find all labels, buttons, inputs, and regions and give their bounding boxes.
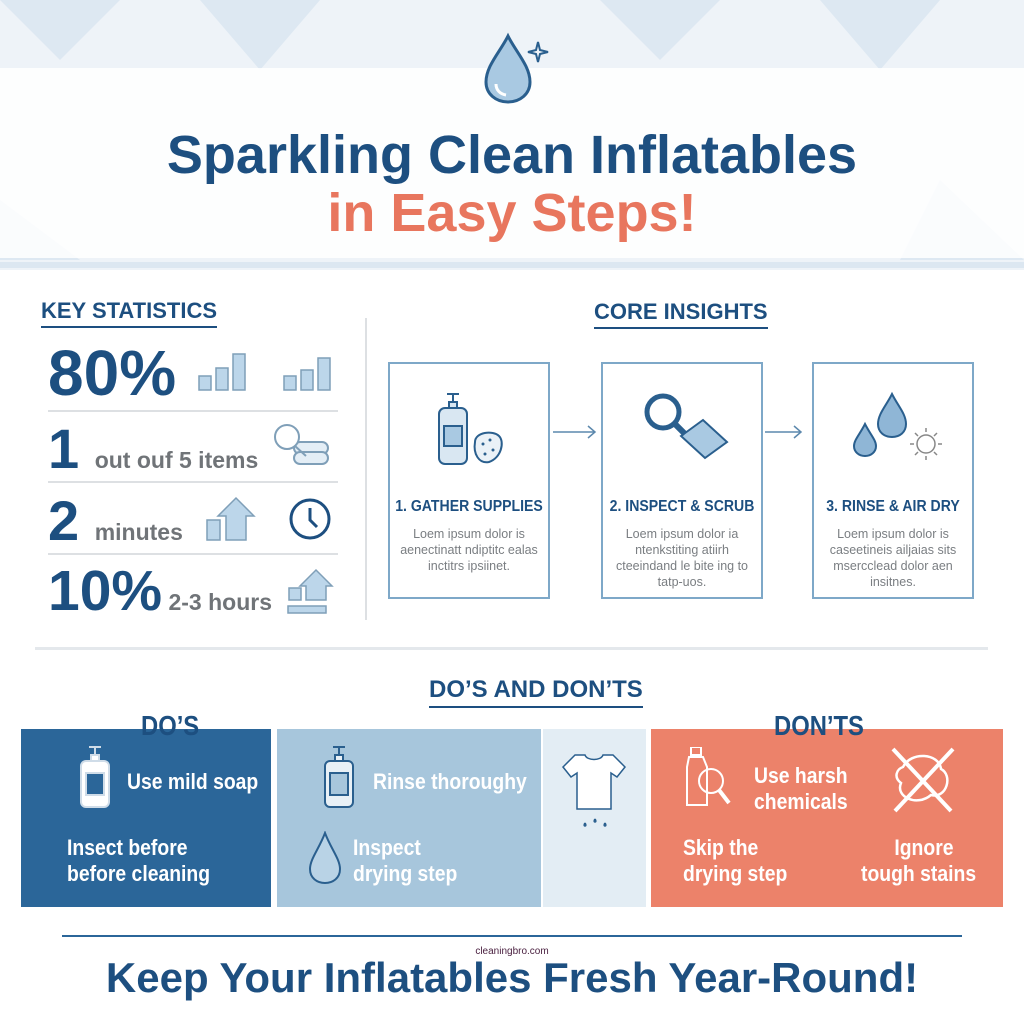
- arrow: [553, 426, 596, 438]
- panel: don'ts: [651, 729, 1003, 907]
- heading: key statistics: KEY STATISTICS: [41, 298, 217, 323]
- stat: 10%: 10% 2-3 hours: [48, 559, 272, 623]
- panel: do's light: drying step: [353, 861, 457, 886]
- icon: drop: [309, 831, 341, 884]
- panel: do's dark: Insect before: [67, 835, 188, 860]
- heading: do's and don'ts: DO’S AND DON’TS: [429, 676, 643, 703]
- icon: bar charts: [198, 353, 331, 391]
- panel: don'ts: tough stains: [861, 861, 976, 886]
- panel: step 3: 3. RINSE & AIR DRY: [826, 498, 960, 515]
- label: do's: DO’S: [141, 710, 199, 741]
- icon: magnifier and sponge: [644, 394, 728, 460]
- panel: step 3: [812, 362, 974, 599]
- title: [167, 125, 857, 243]
- stat: 80%: 80%: [48, 337, 176, 409]
- icon: soap bottle: [80, 746, 110, 808]
- stat: 1 out of 5: 1 out ouf 5 items: [48, 417, 258, 480]
- icon: chemical bottle: [686, 747, 730, 806]
- panel: do's light: Inspect: [353, 835, 421, 860]
- panel: do's dark: before cleaning: [67, 861, 210, 886]
- panel: don'ts: Use harsh: [754, 763, 848, 788]
- icon: drops and sun: [853, 392, 942, 460]
- icon: soap and sponge: [438, 393, 503, 465]
- icon: water drop: [484, 32, 548, 104]
- heading: core insights: CORE INSIGHTS: [594, 299, 768, 324]
- stat: 2 minutes: 2 minutes: [48, 489, 183, 552]
- arrow: [765, 426, 802, 438]
- footer line: [62, 935, 962, 937]
- title: in Easy Steps!: [327, 183, 697, 243]
- panel: step 2: Loem ipsum dolor ia ntenkstiting atiirh cteeindand le bite ing to tatp-uos.: [616, 527, 748, 589]
- title: Sparkling Clean Inflatables: [167, 125, 857, 185]
- panel: step 1: 1. GATHER SUPPLIES: [395, 498, 543, 515]
- label: don'ts: DON’TS: [774, 710, 864, 741]
- icon: bottle: [324, 746, 354, 808]
- vertical divider: [365, 318, 367, 620]
- panel: shirt: [543, 729, 646, 907]
- icon: shirt drying: [562, 754, 626, 827]
- panel: do's light: Rinse thoroughy: [373, 769, 527, 794]
- panel: step 1: Loem ipsum dolor is aenectinatt ndiptitc ealas inctitrs ipsiinet.: [400, 527, 538, 573]
- panel: don'ts: chemicals: [754, 789, 848, 814]
- panel: do's light: [277, 729, 541, 907]
- footer title: Keep Your Inflatables Fresh Year-Round!: [106, 954, 918, 1001]
- panel: do's dark: Use mild soap: [127, 769, 258, 794]
- panel: step 2: [601, 362, 763, 599]
- icon: magnifier: [274, 424, 329, 465]
- panel: don'ts: drying step: [683, 861, 787, 886]
- panel: step 1: [388, 362, 550, 599]
- panel: step 2: 2. INSPECT & SCRUB: [610, 498, 754, 515]
- icon: growth: [287, 569, 334, 614]
- source: cleaningbro.com: [475, 946, 549, 957]
- header background: [0, 0, 1024, 270]
- panel: step 3: Loem ipsum dolor is caseetineis ailjaias sits mserccle­ad dolor aen insitnes.: [830, 527, 956, 589]
- icon: arrow up and clock: [206, 497, 330, 541]
- panel: don'ts: Ignore: [894, 835, 953, 860]
- icon: crossed stain: [892, 748, 954, 812]
- panel: do's dark: [21, 729, 271, 907]
- divider: [35, 647, 988, 650]
- panel: don'ts: Skip the: [683, 835, 758, 860]
